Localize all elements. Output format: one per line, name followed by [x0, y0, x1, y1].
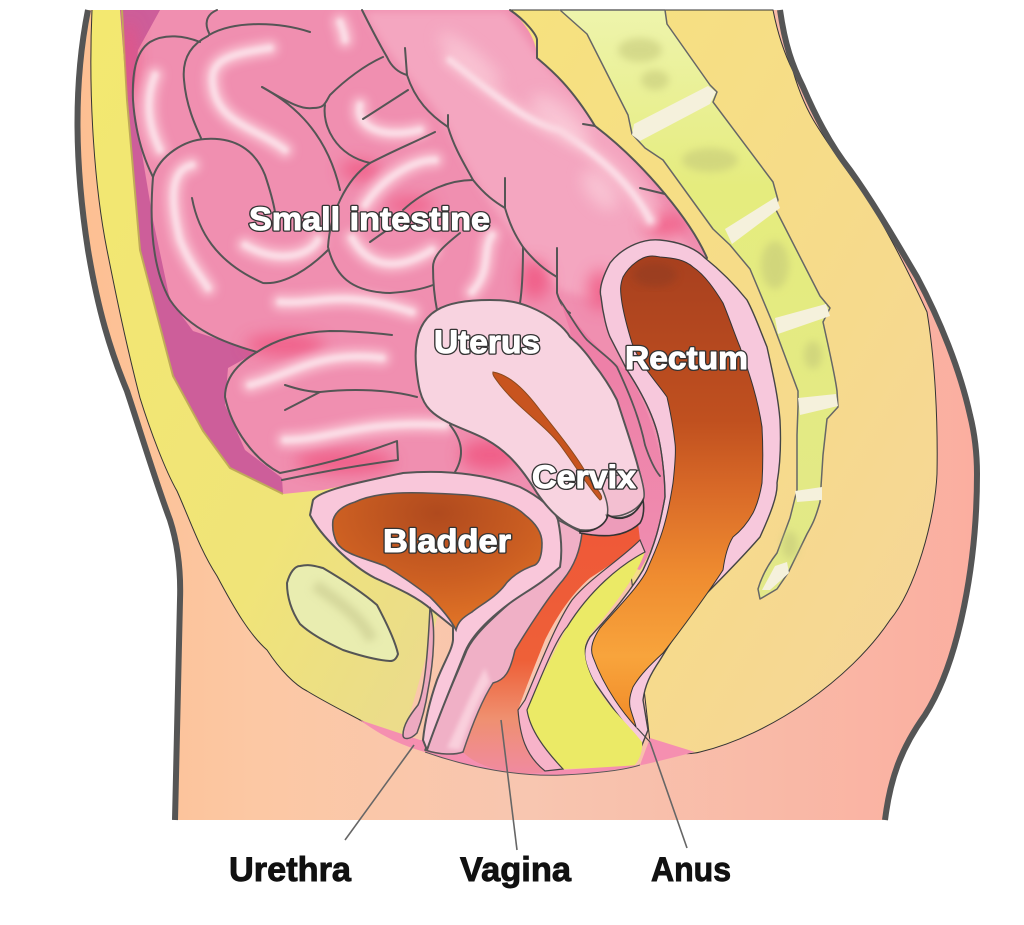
rectum inner wall line [627, 370, 665, 570]
olive edge [122, 10, 283, 494]
vagina [425, 520, 645, 774]
fat layer: back [510, 10, 937, 754]
body outline left [78, 10, 180, 820]
rectum [585, 240, 781, 745]
label: Uterus: Uterus [434, 324, 540, 360]
bladder contents [333, 493, 542, 630]
bladder [310, 472, 561, 750]
cervix [598, 470, 644, 516]
bright highlights [149, 22, 650, 440]
pelvic floor line [425, 752, 640, 775]
pubic bone [287, 565, 398, 661]
magenta edge [120, 10, 283, 494]
tissue between uterus and rectum [560, 300, 665, 570]
anus line [637, 728, 650, 742]
label: Rectum: Rectum [625, 340, 748, 376]
leader line: urethra [345, 745, 414, 840]
rectum contents [592, 256, 763, 727]
intestine fold lines [133, 10, 707, 480]
bladder wall [310, 472, 561, 750]
posterior vaginal fat [525, 552, 645, 769]
fornix [580, 500, 644, 536]
rectum wall [585, 240, 781, 745]
label: Anus: Anus [651, 851, 731, 889]
fat layer: front [91, 10, 470, 739]
vaginal wall highlight [447, 668, 490, 750]
rectum dark patch [633, 263, 677, 287]
uterine cavity [493, 372, 602, 500]
colon blotches [439, 33, 620, 212]
vaginal wall front [425, 520, 582, 754]
label: Cervix: Cervix [532, 459, 636, 495]
label: Cervix: Cervix [532, 459, 636, 495]
body outline right [780, 10, 977, 820]
leader line: vagina [501, 720, 517, 850]
vaginal canal [463, 523, 640, 774]
spine mottling [618, 38, 822, 559]
uterus fold line [560, 300, 660, 476]
urethra side [403, 607, 434, 739]
label: Vagina: Vagina [460, 851, 572, 889]
label: Uterus: Uterus [434, 324, 540, 360]
label: Small intestine: Small intestine [249, 201, 490, 237]
vaginal wall back [518, 540, 645, 771]
bone mottling [315, 585, 372, 640]
label: Small intestine: Small intestine [249, 201, 490, 237]
spine [560, 10, 838, 599]
label: Bladder: Bladder [383, 523, 511, 559]
small intestine [120, 10, 707, 560]
label: Bladder: Bladder [383, 523, 511, 559]
label: Rectum: Rectum [625, 340, 748, 376]
uterus [416, 300, 644, 536]
colon tint [365, 12, 695, 300]
pelvic floor [360, 710, 695, 775]
body silhouette [78, 10, 977, 820]
pink shading [124, 20, 687, 474]
label: Urethra: Urethra [229, 851, 352, 889]
leader line: anus [650, 742, 687, 848]
soft highlights [149, 22, 650, 440]
spine discs [632, 86, 838, 590]
